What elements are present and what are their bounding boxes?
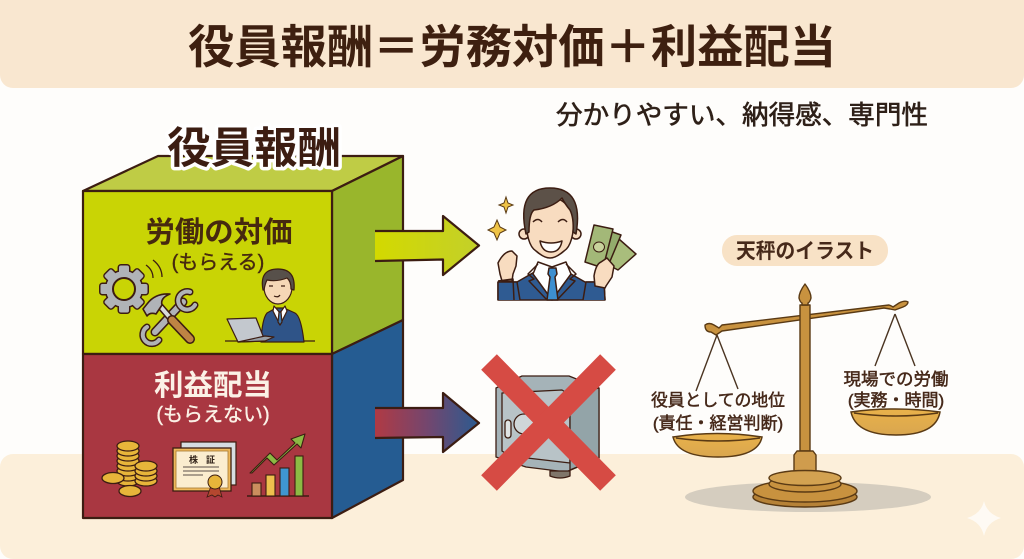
cube top face bbox=[83, 156, 403, 191]
heading: profit dividend: 利益配当 bbox=[154, 369, 272, 402]
subheading: not receivable: (もらえない) bbox=[156, 404, 270, 426]
arrow: to locked safe bbox=[375, 393, 479, 452]
suit bbox=[498, 270, 605, 300]
hammer head bbox=[143, 294, 170, 316]
face bbox=[526, 197, 574, 258]
left pan bbox=[673, 434, 762, 457]
scale post bbox=[753, 284, 857, 507]
label: executive position: 役員としての地位 bbox=[651, 391, 785, 410]
label: on-site labour: (実務・時間) bbox=[848, 391, 944, 410]
scale shadow bbox=[685, 482, 931, 512]
cube label: 役員報酬 bbox=[167, 125, 341, 173]
icon: growth chart bbox=[247, 434, 309, 496]
icon: coin stacks bbox=[102, 441, 157, 496]
hair bbox=[524, 188, 578, 234]
cube side: green bbox=[332, 156, 403, 354]
icon: happy man with money bbox=[498, 188, 636, 300]
heading: labour compensation: 労働の対価 bbox=[146, 216, 292, 249]
label: on-site labour bbox=[844, 370, 948, 410]
scale strings bbox=[696, 314, 915, 391]
right pan bbox=[851, 409, 940, 435]
hand with money bbox=[594, 258, 614, 288]
subtitle: 分かりやすい、納得感、専門性 bbox=[556, 100, 928, 130]
wrench bbox=[155, 302, 183, 332]
hammer handle bbox=[160, 306, 172, 320]
banknotes bbox=[603, 232, 636, 270]
panel: labour compensation bbox=[83, 191, 332, 354]
label pill: scale illustration: 天秤のイラスト bbox=[736, 240, 874, 263]
label: executive position: (責任・経営判断) bbox=[653, 414, 783, 433]
icon: corner sparkle bbox=[967, 501, 1001, 536]
icon: hammer and wrench bbox=[143, 292, 195, 344]
certificate word: 株証 bbox=[189, 455, 215, 465]
ears bbox=[519, 229, 529, 239]
label: on-site labour: 現場での労働 bbox=[844, 370, 948, 389]
label pill: scale illustration bbox=[722, 235, 888, 266]
subheading: receivable: (もらえる) bbox=[172, 252, 264, 274]
cube: compensation block bbox=[83, 156, 403, 518]
icon: sparkles bbox=[488, 197, 513, 240]
icon: red cross bbox=[489, 362, 608, 483]
scale bbox=[673, 284, 940, 512]
fist bbox=[498, 251, 517, 281]
icon: gear bbox=[100, 260, 162, 312]
icon: man at laptop bbox=[225, 269, 315, 342]
header band bbox=[0, 0, 1024, 88]
panel: profit dividend bbox=[83, 354, 332, 518]
label: executive position bbox=[651, 391, 785, 433]
floor band bbox=[0, 454, 1024, 559]
title: 役員報酬＝労務対価＋利益配当 bbox=[188, 21, 836, 73]
icon: safe bbox=[496, 376, 599, 478]
arrow: to happy man bbox=[375, 216, 479, 275]
icon: stock certificate bbox=[173, 442, 236, 497]
cube side: blue bbox=[332, 320, 403, 518]
scale beam bbox=[705, 301, 908, 335]
